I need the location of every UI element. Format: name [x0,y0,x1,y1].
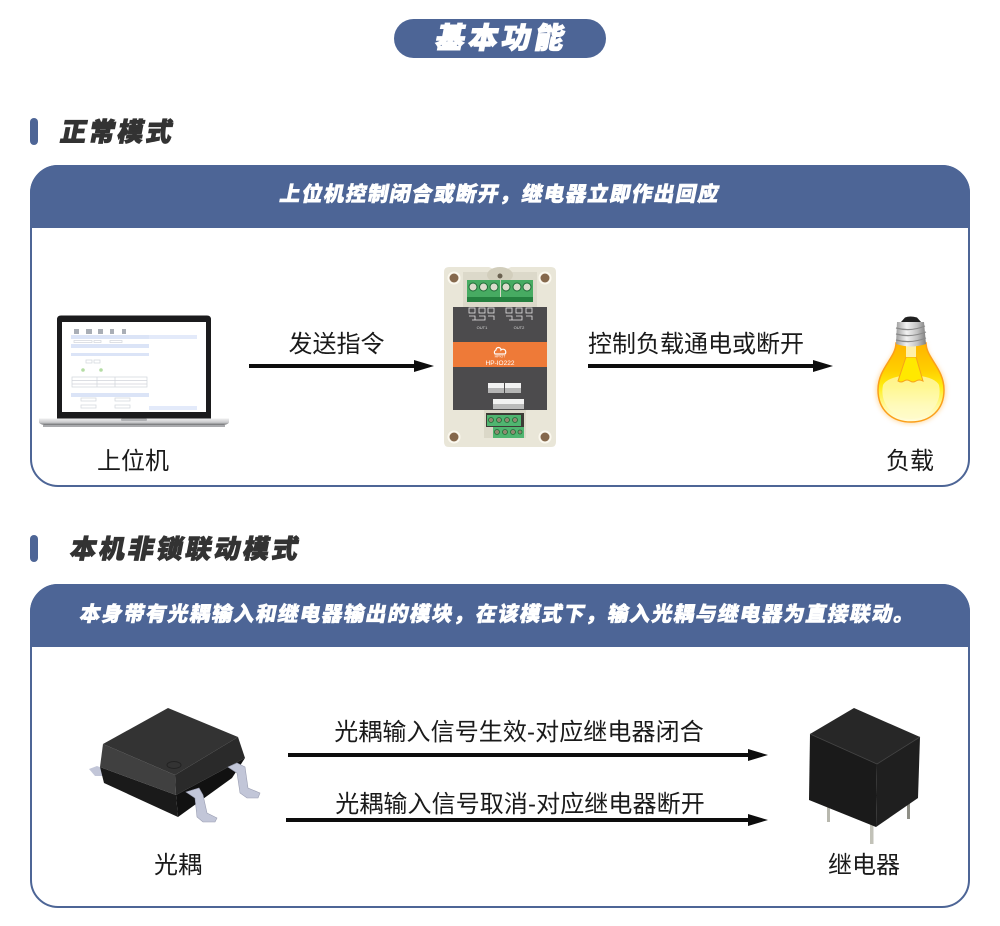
panel frame [30,584,970,908]
heading marker [30,535,38,562]
heading text: 正常模式 [58,117,178,147]
title text: 基本功能 [433,23,571,55]
panel header text: 上位机控制闭合或断开，继电器立即作出回应 [278,183,722,206]
arrow: laptop to device [249,360,434,372]
label: relay: 继电器 [828,852,900,879]
label: control load: 控制负载通电或断开 [588,331,804,358]
arrow: input signal cancelled [286,814,768,826]
icon: relay module device [444,267,556,447]
panel frame [30,165,970,487]
icon: relay module device: HP-IO222 [486,360,515,367]
label: signal cancelled: 光耦输入信号取消-对应继电器断开 [335,791,705,818]
panel header text: 本身带有光耦输入和继电器输出的模块，在该模式下，输入光耦与继电器为直接联动。 [78,603,918,626]
heading text: 本机非锁联动模式 [68,534,304,564]
icon: light bulb [873,316,949,427]
section heading: local non-locking linkage mode [30,534,304,564]
arrow: input signal active [288,749,768,761]
title pill [394,19,606,58]
icon: optocoupler [89,708,260,822]
icon: laptop [39,316,229,427]
label: signal active: 光耦输入信号生效-对应继电器闭合 [334,719,704,746]
label: send command: 发送指令 [288,331,384,358]
panel header band [30,165,970,228]
heading marker [30,118,38,145]
panel: local linkage mode [30,584,970,908]
label: load: 负载 [886,448,934,475]
section heading: normal mode [30,117,178,147]
panel header band [30,584,970,647]
panel: normal mode [30,165,970,487]
icon: relay module device: HPIOT [495,354,506,358]
arrow: device to load [588,360,833,372]
label: host computer: 上位机 [97,448,169,475]
icon: relay module device: OUT1 [477,325,488,330]
label: optocoupler: 光耦 [154,852,202,879]
icon: relay [809,708,920,844]
icon: relay module device: OUT2 [514,325,525,330]
